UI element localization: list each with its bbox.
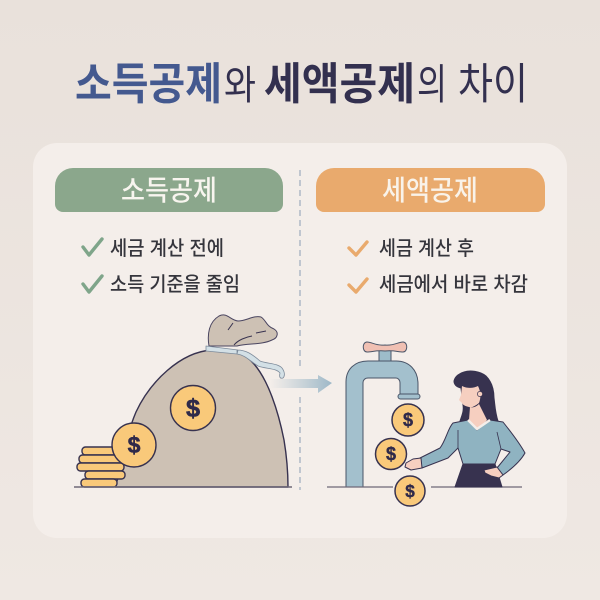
- title: 소득공제: [75, 60, 222, 109]
- left list: [83, 237, 240, 296]
- reaching hand: [405, 458, 422, 470]
- face: [459, 386, 480, 407]
- coin 2: [376, 438, 406, 470]
- sweater: [420, 420, 525, 475]
- coin 3: [395, 476, 425, 506]
- faucet handle: [379, 346, 391, 361]
- left header: 소득공제: [55, 168, 283, 212]
- coin on bag: [170, 386, 216, 430]
- coin 1: [392, 404, 424, 436]
- bag rope: [206, 346, 284, 378]
- neck: [469, 404, 487, 430]
- title: [75, 60, 528, 109]
- check item: subtract directly from tax: 세금에서 바로 차감: [379, 273, 528, 296]
- title: 세액공제: [264, 60, 415, 109]
- bag body: [115, 350, 288, 487]
- hand on hip: [484, 467, 503, 478]
- left header: 소득공제: 소득공제: [121, 175, 217, 206]
- faucet pipe: [346, 361, 418, 487]
- check item: before tax calculation: 세금 계산 전에: [110, 237, 224, 260]
- title: 의: [417, 61, 447, 108]
- check item: after tax calculation: 세금 계산 후: [379, 237, 474, 260]
- panel: comparison card: [33, 143, 567, 538]
- icon: money bag with coins: [77, 315, 288, 487]
- title: 차이: [458, 61, 528, 109]
- falling coins: [376, 404, 425, 506]
- hair: [454, 371, 498, 421]
- right header: 세액공제: 세액공제: [382, 175, 478, 206]
- check item: reduce income base: 소득 기준을 줄임: [110, 273, 240, 296]
- bag neck: [208, 315, 277, 346]
- figure: woman catching coins: [405, 371, 525, 487]
- skirt: [455, 464, 502, 487]
- check item: after tax calculation: [349, 237, 474, 260]
- ground lines: [327, 486, 522, 488]
- coin stack: [77, 447, 125, 487]
- ear: [477, 391, 483, 397]
- title: 와: [224, 64, 256, 108]
- front coin: [112, 423, 156, 467]
- right list: [349, 237, 528, 296]
- arrow: left to right: [270, 375, 332, 393]
- right header: 세액공제: [316, 168, 545, 212]
- icon: faucet: [346, 342, 420, 487]
